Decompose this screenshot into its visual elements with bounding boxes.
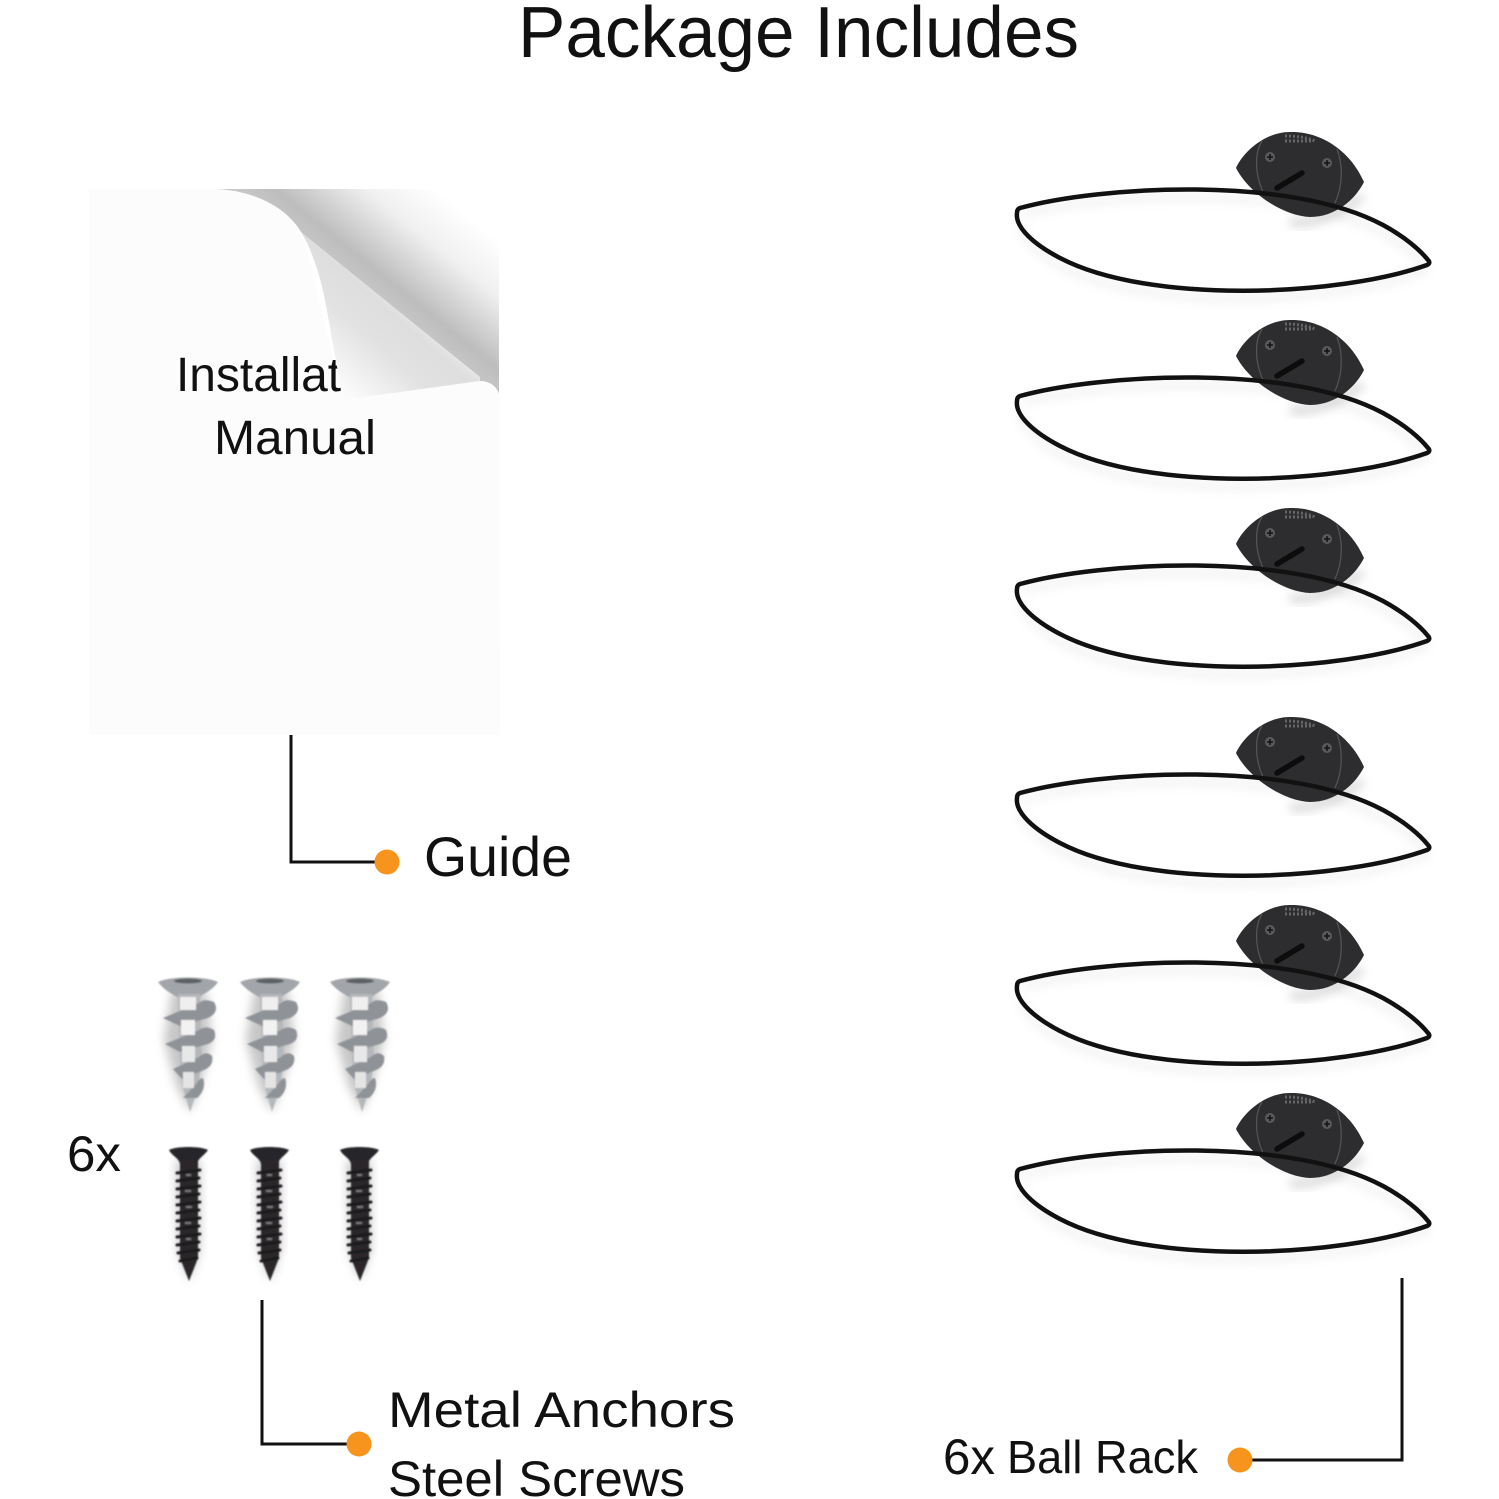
label: ball rack: Ball Rack <box>1007 1431 1199 1483</box>
lower page corner <box>343 381 500 410</box>
page curl shadow <box>215 189 499 394</box>
leader: guide <box>291 735 400 874</box>
leader: anchors and screws <box>262 1300 372 1456</box>
label: metal anchors and steel screws: Metal Anchors <box>388 1382 735 1438</box>
icon: ball rack 4 <box>1017 717 1429 883</box>
label: ball rack: 6x <box>943 1429 995 1485</box>
icon: ball rack 6 <box>1017 1093 1429 1259</box>
page curl flap <box>301 232 480 400</box>
label: metal anchors and steel screws <box>388 1382 735 1499</box>
icon: ball rack 2 <box>1017 320 1429 486</box>
leader: ball rack <box>1228 1278 1402 1472</box>
icon: ball rack 5 <box>1017 905 1429 1071</box>
label: ball rack <box>943 1429 1199 1485</box>
quantity label: 6x: 6x <box>67 1126 121 1182</box>
manual heading, first line: Installation <box>176 349 405 402</box>
icon: metal anchors <box>158 978 390 1112</box>
panel: six ball racks <box>1017 132 1429 1259</box>
paper sheet <box>89 189 500 735</box>
panel: installation manual guide <box>89 189 500 735</box>
label: guide: Guide <box>424 825 572 888</box>
icon: ball rack 1 <box>1017 132 1429 298</box>
icon: steel screws <box>169 1147 379 1281</box>
manual heading, second line: Manual <box>214 412 376 465</box>
icon: ball rack 3 <box>1017 508 1429 674</box>
